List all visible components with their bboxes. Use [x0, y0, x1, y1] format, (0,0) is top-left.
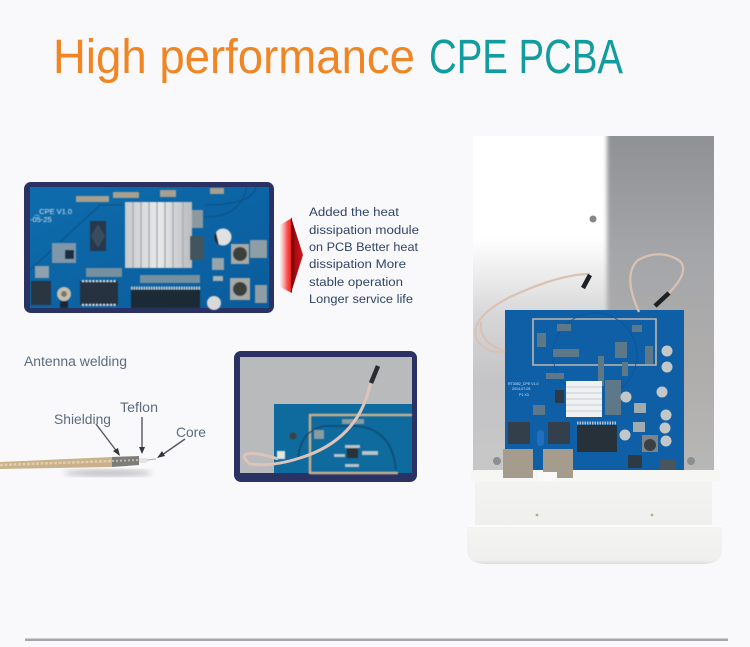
PCB: P1 X3: [519, 393, 529, 397]
ethernet ports: [503, 449, 533, 480]
cable: [0, 456, 156, 469]
text block: heat dissipation description: on PCB Better heat: [309, 240, 419, 254]
divider line: [25, 638, 728, 641]
text block: heat dissipation description: dissipation module: [309, 223, 419, 237]
heading: antenna welding: Antenna welding: [24, 354, 127, 369]
heatsink: [125, 202, 192, 268]
title: [53, 31, 623, 84]
metal back plate: [473, 136, 714, 470]
board silkscreen label: RT3052_CPE V1.0: [508, 382, 539, 386]
label: shielding: [54, 411, 120, 456]
title: High performance: [53, 31, 415, 84]
diagram: coaxial cable with labels: [0, 399, 206, 476]
label: teflon: Teflon: [120, 399, 158, 415]
label: shielding: Shielding: [54, 411, 111, 427]
coax pigtail: [244, 366, 378, 465]
text block: heat dissipation description: dissipation More: [309, 257, 406, 271]
text block: heat dissipation description: [309, 205, 419, 306]
antenna cables: [475, 254, 683, 352]
product photo: CPE with PCB: [465, 130, 722, 564]
board silkscreen label: _CPE V1.0: [34, 207, 72, 216]
label: core: [157, 424, 206, 458]
white housing: [467, 470, 722, 564]
PCB: [503, 310, 684, 480]
panel: heat dissipation PCB photo: [24, 182, 274, 313]
PCB: 2014-07-05: [512, 387, 530, 391]
panel: antenna welding photo: [234, 351, 417, 482]
icon: red arrow: [280, 217, 303, 293]
text block: heat dissipation description: stable operation: [309, 275, 403, 289]
text block: heat dissipation description: Longer service life: [309, 292, 413, 306]
heatsink: [566, 381, 602, 417]
panel: heat dissipation PCB photo: -05-25: [30, 215, 52, 224]
text block: heat dissipation description: Added the heat: [309, 205, 400, 219]
label: teflon: [120, 399, 158, 454]
title: CPE PCBA: [429, 31, 623, 84]
label: core: Core: [176, 424, 206, 440]
